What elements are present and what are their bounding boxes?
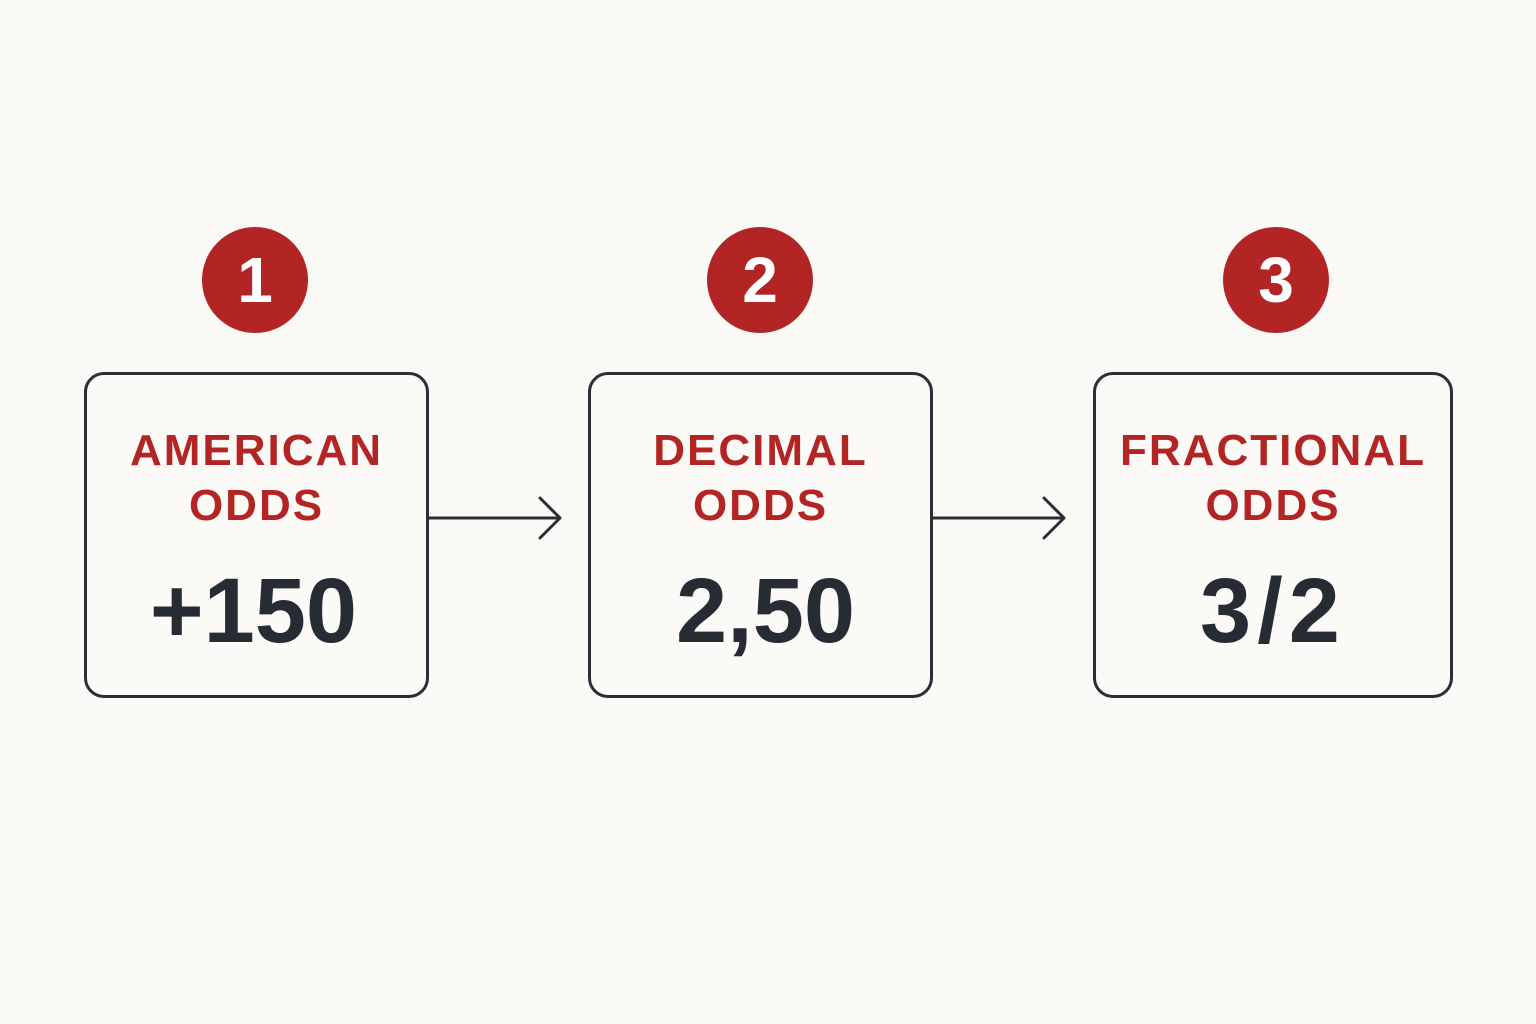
- panel: american odds: [84, 372, 429, 698]
- value: 2,50: 2,50: [676, 560, 855, 662]
- panel: fractional odds: [1093, 372, 1453, 698]
- panel: decimal odds: [588, 372, 933, 698]
- arrow 1: [429, 496, 562, 540]
- heading: decimal odds: [653, 426, 868, 530]
- step circle 1: 1: [237, 244, 273, 316]
- heading: fractional odds: [1120, 426, 1426, 530]
- heading: fractional odds: FRACTIONAL: [1120, 426, 1426, 475]
- heading: decimal odds: DECIMAL: [653, 426, 868, 475]
- step circle 1: [202, 227, 308, 333]
- heading: american odds: [130, 426, 383, 530]
- value: +150: +150: [150, 560, 357, 662]
- heading: decimal odds: ODDS: [693, 481, 828, 530]
- arrow 2: [933, 496, 1066, 540]
- value: 3/2: 3/2: [1200, 560, 1346, 662]
- step circle 2: [707, 227, 813, 333]
- step circle 2: 2: [742, 244, 778, 316]
- heading: american odds: ODDS: [189, 481, 324, 530]
- heading: american odds: AMERICAN: [130, 426, 383, 475]
- step circle 3: 3: [1258, 244, 1294, 316]
- step circle 3: [1223, 227, 1329, 333]
- heading: fractional odds: ODDS: [1205, 481, 1341, 530]
